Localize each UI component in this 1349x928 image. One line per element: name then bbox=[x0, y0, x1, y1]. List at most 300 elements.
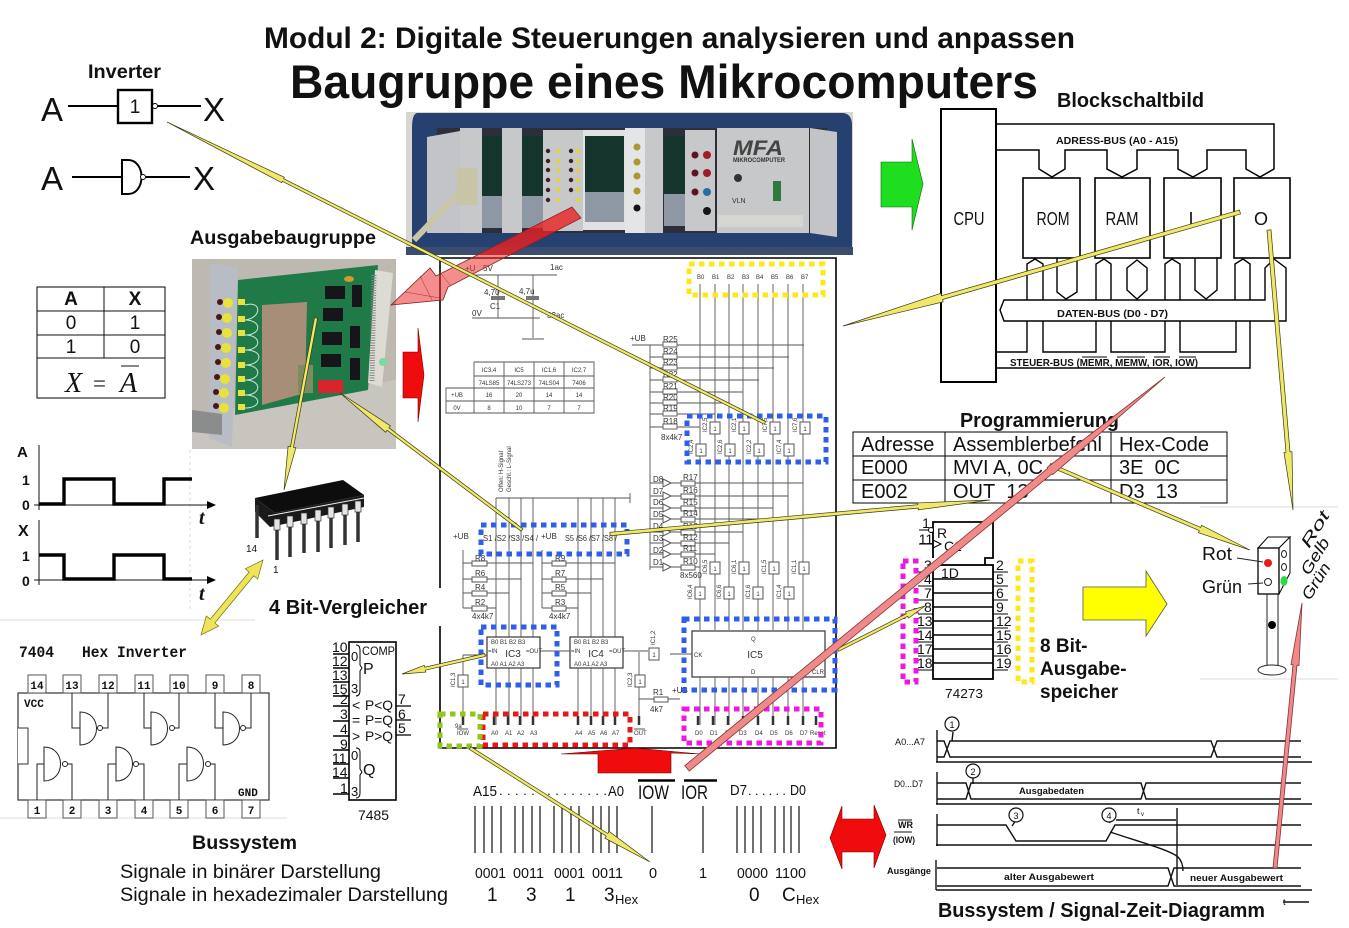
photo: output module card bbox=[192, 259, 396, 449]
inverter gates lower rows: 1 bbox=[713, 567, 717, 573]
LEDs D1-D8 with series resistors: D2 bbox=[653, 546, 664, 555]
connector pins and labels: A4 bbox=[575, 731, 583, 737]
connector pins and labels: A5 bbox=[588, 731, 596, 737]
comparators IC3, IC4 and latch IC5: CLR bbox=[812, 670, 825, 676]
7485 comparator symbol: 4 bbox=[340, 721, 348, 737]
pull-up resistors R18-R25: R25 bbox=[663, 335, 678, 344]
address bus: ADRESS-BUS (A0 - A15) bbox=[1056, 135, 1178, 147]
text: hexadecimal signals: Signale in hexadezimaler Darstellung bbox=[120, 884, 448, 906]
inverter gates upper rows: IC2,6 bbox=[718, 439, 724, 454]
7485 comparator symbol: COMP bbox=[362, 644, 395, 658]
LEDs D1-D8 with series resistors: R14 bbox=[683, 509, 698, 518]
connector pins and labels: IOW bbox=[457, 731, 469, 737]
inverter gates lower rows: IC1,1 bbox=[792, 559, 798, 574]
inverter gates upper rows: IC7,4 bbox=[777, 439, 783, 454]
traffic light: Grün bbox=[1202, 577, 1242, 597]
bus signal lines: A15 bbox=[473, 783, 497, 800]
7485 comparator symbol: 3 bbox=[351, 681, 358, 696]
7404 hex inverter diagram: 2 bbox=[69, 806, 75, 818]
input resistors R2-R9: R5 bbox=[555, 583, 566, 592]
7404 hex inverter diagram: GND bbox=[238, 788, 258, 800]
comparators IC3, IC4 and latch IC5: IC3 bbox=[505, 649, 521, 660]
DIP switches S1-S8: +UB bbox=[453, 532, 469, 541]
dashed highlight: magenta latch inputs bbox=[903, 561, 916, 682]
pull-up resistors R18-R25: R24 bbox=[663, 347, 678, 356]
heading: block diagram: Blockschaltbild bbox=[1057, 90, 1204, 112]
signal timing diagram: alter Ausgabewert bbox=[1004, 872, 1094, 882]
7485 comparator symbol: > bbox=[352, 728, 360, 744]
7404 hex inverter diagram: 8 bbox=[248, 681, 255, 693]
signal timing diagram: A0...A7 bbox=[895, 737, 925, 747]
signal timing diagram: 1 bbox=[949, 720, 955, 730]
connector pins and labels: A0 bbox=[491, 731, 499, 737]
output terminals B0-B7: B7 bbox=[801, 275, 809, 281]
label: 8 bit output latch: speicher bbox=[1040, 682, 1119, 703]
inverter gates lower rows: IC1,5 bbox=[762, 559, 768, 574]
7404 hex inverter diagram: Hex Inverter bbox=[82, 644, 187, 662]
DIP package chip: 1 bbox=[273, 565, 279, 576]
supply pin table: 0V bbox=[453, 406, 461, 412]
title: main heading: Baugruppe eines Mikrocomputers bbox=[290, 55, 1038, 108]
supply pin table: IC2,7 bbox=[572, 368, 587, 374]
supply pin table: 20 bbox=[516, 393, 523, 399]
supply pin table: 7406 bbox=[572, 381, 586, 387]
signal timing diagram bbox=[887, 717, 1312, 907]
I port: I bbox=[1188, 209, 1194, 229]
comparators IC3, IC4 and latch IC5: 4k7 bbox=[650, 705, 663, 714]
connector pins and labels: A2 bbox=[517, 731, 525, 737]
timing diagram: inverter input and output bbox=[17, 444, 216, 610]
timing diagram: inverter input and output: 0 bbox=[22, 497, 30, 513]
title: module: Modul 2: Digitale Steuerungen analysieren und anpassen bbox=[264, 22, 1075, 55]
block arrow: red bus to schematic bbox=[561, 748, 700, 773]
DIP package chip bbox=[246, 480, 364, 576]
7485 comparator symbol: < bbox=[352, 697, 360, 713]
inverter gates upper rows: 1 bbox=[773, 427, 777, 433]
74273 latch symbol: 18 bbox=[917, 655, 933, 671]
pull-up resistors R18-R25: R22 bbox=[663, 370, 678, 379]
inverter gates upper rows: 1 bbox=[728, 449, 732, 455]
signal timing diagram: 2 bbox=[970, 767, 976, 777]
pull-up resistors R18-R25: R18 bbox=[663, 417, 678, 426]
7404 hex inverter diagram: 9 bbox=[212, 681, 218, 693]
schematic frame bbox=[440, 258, 836, 748]
timing diagram: inverter input and output: 0 bbox=[22, 573, 30, 589]
pull-up resistors R18-R25: R23 bbox=[663, 358, 678, 367]
bus signal lines: 0 bbox=[749, 885, 760, 906]
truth table bbox=[37, 287, 165, 399]
input resistors R2-R9: R6 bbox=[475, 569, 486, 578]
inverter gates upper rows: 1 bbox=[803, 427, 807, 433]
signal timing diagram: (IOW) bbox=[893, 835, 915, 845]
comparators IC3, IC4 and latch IC5 bbox=[451, 630, 825, 725]
7485 comparator symbol: 12 bbox=[332, 653, 348, 669]
signal timing diagram: Ausgabedaten bbox=[1019, 786, 1084, 796]
connector pins and labels bbox=[455, 716, 826, 737]
connector pins and labels: D6 bbox=[785, 731, 793, 737]
comparators IC3, IC4 and latch IC5: =OUT bbox=[609, 649, 626, 655]
LEDs D1-D8 with series resistors bbox=[650, 473, 803, 580]
7404 hex inverter diagram: 6 bbox=[212, 806, 218, 818]
signal timing diagram: 3 bbox=[1013, 811, 1019, 821]
74273 latch symbol: 13 bbox=[917, 613, 933, 629]
O port bbox=[1234, 178, 1290, 258]
input resistors R2-R9: R8 bbox=[475, 554, 486, 563]
7485 comparator symbol: 14 bbox=[332, 764, 348, 780]
inverter symbols: X bbox=[193, 160, 215, 197]
bus signal lines: 0 bbox=[649, 866, 657, 882]
pull-up resistors R18-R25: R19 bbox=[663, 404, 678, 413]
comparators IC3, IC4 and latch IC5: R1 bbox=[653, 688, 664, 697]
comparators IC3, IC4 and latch IC5: =IN bbox=[571, 649, 581, 655]
timing diagram: inverter input and output: A bbox=[17, 444, 28, 461]
7404 hex inverter diagram: 7 bbox=[248, 806, 254, 818]
output terminals B0-B7: B3 bbox=[742, 275, 750, 281]
74273 latch symbol: 74273 bbox=[945, 686, 983, 701]
bus signal lines: 3 bbox=[526, 885, 537, 906]
connector pins and labels: A3 bbox=[530, 731, 538, 737]
inverter gates lower rows: 1 bbox=[802, 567, 806, 573]
input resistors R2-R9: R3 bbox=[555, 598, 566, 607]
signal timing diagram: neuer Ausgabewert bbox=[1190, 873, 1283, 883]
bus signal lines: 1 bbox=[699, 866, 707, 882]
bus signal lines: A0 bbox=[608, 783, 624, 800]
74273 latch symbol: 17 bbox=[917, 641, 933, 657]
comparators IC3, IC4 and latch IC5: +UB bbox=[672, 686, 688, 695]
power supply capacitors: 32ac bbox=[547, 311, 564, 320]
heading: bus system: Bussystem bbox=[192, 833, 297, 854]
bus signal lines: . . . . . . bbox=[748, 783, 786, 798]
output terminals B0-B7: B4 bbox=[756, 275, 764, 281]
LEDs D1-D8 with series resistors: D6 bbox=[653, 498, 664, 507]
control bus bbox=[996, 321, 1250, 369]
signal timing diagram: WR bbox=[898, 820, 913, 830]
traffic light: Gelb bbox=[1298, 535, 1334, 578]
connector pins and labels: D3 bbox=[739, 731, 747, 737]
programming table: 3E 0C bbox=[1119, 457, 1180, 479]
7485 comparator symbol bbox=[332, 639, 411, 823]
CPU: CPU bbox=[954, 209, 984, 229]
bus signal lines: Hex bbox=[796, 892, 820, 907]
inverter gates lower rows: IC1,4 bbox=[777, 584, 783, 599]
7485 comparator symbol: P>Q bbox=[365, 728, 393, 744]
address bus bbox=[996, 124, 1274, 177]
inverter gates upper rows: IC2,2 bbox=[747, 439, 753, 454]
comparators IC3, IC4 and latch IC5: A0 A1 A2 A3 bbox=[491, 662, 525, 668]
inverter gates lower rows bbox=[688, 559, 809, 599]
comparators IC3, IC4 and latch IC5: B0 B1 B2 B3 bbox=[491, 640, 526, 646]
connector pins and labels: 9a bbox=[455, 724, 462, 730]
inverter symbols bbox=[41, 62, 225, 197]
supply pin table: 7 bbox=[577, 406, 581, 412]
data bus: DATEN-BUS (D0 - D7) bbox=[1057, 308, 1168, 320]
power supply capacitors: 4,7u bbox=[519, 287, 535, 296]
power supply capacitors bbox=[465, 263, 564, 339]
LEDs D1-D8 with series resistors: D7 bbox=[653, 487, 664, 496]
DIP switches S1-S8: Geschl.: L-Signal bbox=[507, 446, 513, 492]
LEDs D1-D8 with series resistors: R13 bbox=[683, 522, 698, 531]
7404 hex inverter diagram: 1 bbox=[34, 806, 41, 818]
input resistors R2-R9: R9 bbox=[555, 554, 566, 563]
comparators IC3, IC4 and latch IC5: D bbox=[751, 670, 756, 676]
control bus: STEUER-BUS (MEMR, MEMW, IOR, IOW) bbox=[1010, 357, 1198, 369]
74273 latch symbol: 15 bbox=[996, 627, 1012, 643]
programming table: E002 bbox=[861, 481, 908, 503]
7404 hex inverter diagram: 4 bbox=[141, 806, 148, 818]
bus signal lines bbox=[473, 780, 820, 907]
label: 8 bit output latch: 8 Bit- bbox=[1040, 636, 1088, 657]
traffic light: Grün bbox=[1299, 560, 1335, 603]
block arrow: red card to schematic bbox=[403, 328, 424, 422]
bus signal lines: 1100 bbox=[775, 866, 806, 882]
comparators IC3, IC4 and latch IC5: IC2,3 bbox=[628, 672, 634, 687]
ROM bbox=[1023, 178, 1080, 258]
DIP switches S1-S8: S1 /S2 /S3 /S4 / bbox=[483, 534, 539, 543]
CPU bbox=[941, 109, 996, 382]
signal timing diagram: v bbox=[1141, 812, 1144, 818]
7485 comparator symbol: 10 bbox=[332, 639, 348, 655]
7404 hex inverter diagram: 5 bbox=[176, 806, 183, 818]
dashed highlight: red address pins bbox=[483, 714, 630, 745]
truth table: 0 bbox=[66, 313, 76, 334]
dashed highlight: green IOW pin bbox=[440, 714, 480, 746]
data bus bbox=[1000, 258, 1286, 321]
74273 latch symbol: 1 bbox=[922, 515, 930, 531]
7485 comparator symbol: 6 bbox=[398, 706, 406, 722]
truth table: A bbox=[64, 289, 78, 310]
pointer: switches to card bbox=[340, 393, 523, 531]
DIP switches S1-S8: S5 /S6 /S7 /S8 / bbox=[565, 534, 618, 543]
LEDs D1-D8 with series resistors: R12 bbox=[683, 533, 698, 542]
pointer: card to chip bbox=[284, 318, 318, 490]
O port: O bbox=[1254, 209, 1268, 229]
7485 comparator symbol: P<Q bbox=[365, 697, 393, 713]
pointer: program to traffic light bbox=[1049, 463, 1250, 550]
connector pins and labels: D4 bbox=[755, 731, 763, 737]
7485 comparator symbol: 7 bbox=[398, 691, 406, 707]
comparators IC3, IC4 and latch IC5: CK bbox=[694, 653, 702, 659]
LEDs D1-D8 with series resistors: 8x560 bbox=[680, 571, 702, 580]
RAM: RAM bbox=[1106, 209, 1138, 229]
input resistors R2-R9: R2 bbox=[475, 598, 486, 607]
truth table: = bbox=[93, 371, 106, 396]
pointer: IC3 to comparator bbox=[402, 654, 485, 674]
dashed highlight: blue switches bbox=[481, 525, 627, 554]
dashed highlight: blue inverters bbox=[687, 416, 826, 462]
74273 latch symbol: 5 bbox=[996, 571, 1004, 587]
7485 comparator symbol: 3 bbox=[351, 784, 358, 799]
output terminals B0-B7: B5 bbox=[771, 275, 779, 281]
inverter gates upper rows bbox=[689, 417, 810, 456]
supply pin table: IC3,4 bbox=[482, 368, 497, 374]
heading: output module: Ausgabebaugruppe bbox=[190, 228, 376, 249]
programming table: Assemblerbefehl bbox=[953, 434, 1102, 456]
truth table: 0 bbox=[130, 337, 140, 358]
LEDs D1-D8 with series resistors: R10 bbox=[683, 557, 698, 566]
supply pin table: 14 bbox=[576, 393, 583, 399]
input resistors R2-R9: 4x4k7 bbox=[549, 612, 571, 621]
bus signal lines: 3 bbox=[604, 885, 615, 906]
inverter gates upper rows: IC7,5 bbox=[763, 417, 769, 432]
dashed highlight: yellow B0-B7 bbox=[689, 264, 823, 295]
bus signal lines: D0 bbox=[790, 782, 806, 799]
connector pins and labels: A1 bbox=[505, 731, 513, 737]
74273 latch symbol: 14 bbox=[917, 627, 933, 643]
bus signal lines: 0011 bbox=[513, 866, 544, 882]
signal timing diagram: Ausgänge bbox=[887, 866, 931, 876]
pull-up resistors R18-R25 bbox=[630, 334, 804, 570]
label: 8 bit output latch: Ausgabe- bbox=[1040, 659, 1127, 680]
truth table: X bbox=[129, 289, 142, 310]
bus signal lines: 0000 bbox=[737, 866, 768, 882]
inverter gates upper rows: IC7,6 bbox=[793, 417, 799, 432]
dashed highlight: magenta data pins bbox=[684, 709, 821, 743]
pull-up resistors R18-R25: +UB bbox=[630, 334, 646, 343]
inverter symbols: 1 bbox=[130, 97, 140, 118]
LEDs D1-D8 with series resistors: R17 bbox=[683, 473, 698, 482]
text: binary signals: Signale in binärer Darstellung bbox=[120, 861, 381, 883]
pointer: switches to program bbox=[610, 500, 990, 536]
label: 8 bit output latch bbox=[1040, 636, 1127, 703]
inverter gates lower rows: 1 bbox=[742, 567, 746, 573]
timing diagram: inverter input and output: t bbox=[199, 583, 206, 605]
power supply capacitors: 4,70 bbox=[484, 288, 500, 297]
74273 latch symbol: C1 bbox=[944, 538, 962, 554]
pointer: timing diagram to traffic light bbox=[1273, 603, 1302, 868]
inverter gates upper rows: IC2,1 bbox=[732, 417, 738, 432]
connector pins and labels: OUT bbox=[634, 731, 647, 737]
heading: comparator: 4 Bit-Vergleicher bbox=[269, 597, 427, 619]
signal timing diagram: t bbox=[1137, 806, 1140, 816]
input resistors R2-R9: R4 bbox=[475, 583, 486, 592]
inverter gates upper rows: IC2,5 bbox=[703, 417, 709, 432]
7404 hex inverter diagram: 12 bbox=[101, 681, 115, 693]
input resistors R2-R9: R7 bbox=[555, 569, 566, 578]
7485 comparator symbol: 1 bbox=[340, 780, 348, 796]
inverter symbols: A bbox=[41, 91, 63, 128]
74273 latch symbol: 8 bbox=[924, 599, 932, 615]
power supply capacitors: +U bbox=[465, 264, 476, 273]
pointer: output port to schematic bbox=[843, 210, 1241, 326]
connector pins and labels: A7 bbox=[612, 731, 620, 737]
DIP package chip: 14 bbox=[246, 544, 258, 555]
pointer: inverter to schematic bbox=[167, 122, 766, 424]
7485 comparator symbol: 15 bbox=[332, 681, 348, 697]
power supply capacitors: 0V bbox=[472, 309, 482, 318]
bus signal lines: 1 bbox=[565, 885, 576, 906]
inverter gates upper rows: 1 bbox=[757, 449, 761, 455]
bus signal lines: . . . . . . . . . . . . . . bbox=[499, 783, 607, 798]
7485 comparator symbol: 0 bbox=[351, 649, 358, 664]
74273 latch symbol: 4 bbox=[924, 571, 932, 587]
pointer: output port to traffic light bbox=[1267, 230, 1293, 510]
74273 latch symbol: 19 bbox=[996, 655, 1012, 671]
heading: signal timing: Bussystem / Signal-Zeit-Diagramm bbox=[938, 899, 1265, 922]
7485 comparator symbol: P bbox=[363, 661, 374, 678]
7485 comparator symbol: 5 bbox=[398, 720, 406, 736]
7485 comparator symbol: P=Q bbox=[365, 712, 393, 728]
inverter gates lower rows: IC1,6 bbox=[746, 584, 752, 599]
7485 comparator symbol: 11 bbox=[332, 750, 347, 766]
programming table: OUT 13 bbox=[953, 481, 1029, 503]
DIP switches S1-S8 bbox=[453, 446, 630, 637]
inverter gates lower rows: IC6,6 bbox=[717, 584, 723, 599]
supply pin table: 8 bbox=[487, 406, 491, 412]
7404 hex inverter diagram: 7404 bbox=[19, 644, 54, 662]
LEDs D1-D8 with series resistors: D4 bbox=[653, 522, 664, 531]
timing diagram: inverter input and output: 1 bbox=[22, 548, 30, 564]
dashed highlight: yellow latch outputs bbox=[1018, 561, 1032, 682]
bus signal lines: Hex bbox=[615, 892, 639, 907]
supply pin table: IC1,6 bbox=[542, 368, 557, 374]
DIP switches S1-S8: +UB bbox=[541, 532, 557, 541]
74273 latch symbol bbox=[917, 515, 1012, 701]
bus signal lines: 1 bbox=[487, 885, 498, 906]
inverter gates lower rows: 1 bbox=[756, 592, 760, 598]
LEDs D1-D8 with series resistors: D8 bbox=[653, 475, 664, 484]
bus signal lines: 0011 bbox=[592, 866, 623, 882]
comparators IC3, IC4 and latch IC5: IC1,3 bbox=[451, 672, 457, 687]
74273 latch symbol: 16 bbox=[996, 641, 1012, 657]
connector pins and labels: D0 bbox=[695, 731, 703, 737]
supply pin table: 14 bbox=[546, 393, 553, 399]
dashed highlight: blue IC5 bbox=[684, 619, 835, 690]
7404 hex inverter diagram: 3 bbox=[105, 806, 112, 818]
LEDs D1-D8 with series resistors: D1 bbox=[653, 558, 664, 567]
heading: programming: Programmierung bbox=[960, 410, 1119, 432]
power supply capacitors: 5V bbox=[483, 264, 493, 273]
timing diagram: inverter input and output: t bbox=[199, 507, 206, 529]
supply pin table: 74LS85 bbox=[479, 381, 500, 387]
7404 hex inverter diagram: VCC bbox=[24, 699, 44, 711]
pull-up resistors R18-R25: R21 bbox=[663, 382, 678, 391]
power supply capacitors: C1 bbox=[490, 302, 501, 311]
comparators IC3, IC4 and latch IC5: 1 bbox=[652, 653, 656, 659]
block arrow: red double bus to timing bbox=[830, 805, 886, 869]
inverter gates upper rows: 1 bbox=[742, 427, 746, 433]
programming table bbox=[853, 432, 1227, 503]
supply pin table: 10 bbox=[516, 406, 523, 412]
7485 comparator symbol: 13 bbox=[332, 667, 348, 683]
DIP switches S1-S8: Offen: H-Signal bbox=[499, 451, 505, 492]
74273 latch symbol: 6 bbox=[996, 585, 1004, 601]
supply pin table: IC5 bbox=[514, 368, 524, 374]
double arrow: chip and 7404 bbox=[201, 560, 263, 635]
inverter gates lower rows: IC6,1 bbox=[732, 559, 738, 574]
input resistors R2-R9: 4x4k7 bbox=[472, 612, 494, 621]
74273 latch symbol: 7 bbox=[924, 585, 932, 601]
truth table: 1 bbox=[66, 337, 76, 358]
7485 comparator symbol: 7485 bbox=[358, 807, 389, 823]
signal timing diagram: t bbox=[1283, 897, 1286, 907]
timing diagram: inverter input and output: 1 bbox=[22, 472, 30, 488]
signal timing diagram: 4 bbox=[1106, 811, 1112, 821]
inverter gates lower rows: 1 bbox=[698, 592, 702, 598]
7485 comparator symbol: 9 bbox=[340, 736, 348, 752]
inverter gates upper rows: 1 bbox=[699, 449, 703, 455]
inverter gates upper rows: 1 bbox=[787, 449, 791, 455]
block diagram bbox=[941, 109, 1290, 382]
block arrow: green to block diagram bbox=[881, 139, 923, 230]
input resistors R2-R9 bbox=[463, 550, 615, 621]
pointer: IOW pin to bus line bbox=[469, 747, 650, 862]
block arrow: photo to output card bbox=[391, 207, 581, 305]
output terminals B0-B7 bbox=[697, 275, 809, 630]
connector pins and labels: A6 bbox=[600, 731, 608, 737]
programming table: E000 bbox=[861, 457, 908, 479]
dashed highlight: blue IC3 bbox=[481, 627, 557, 685]
ROM: ROM bbox=[1036, 209, 1070, 229]
